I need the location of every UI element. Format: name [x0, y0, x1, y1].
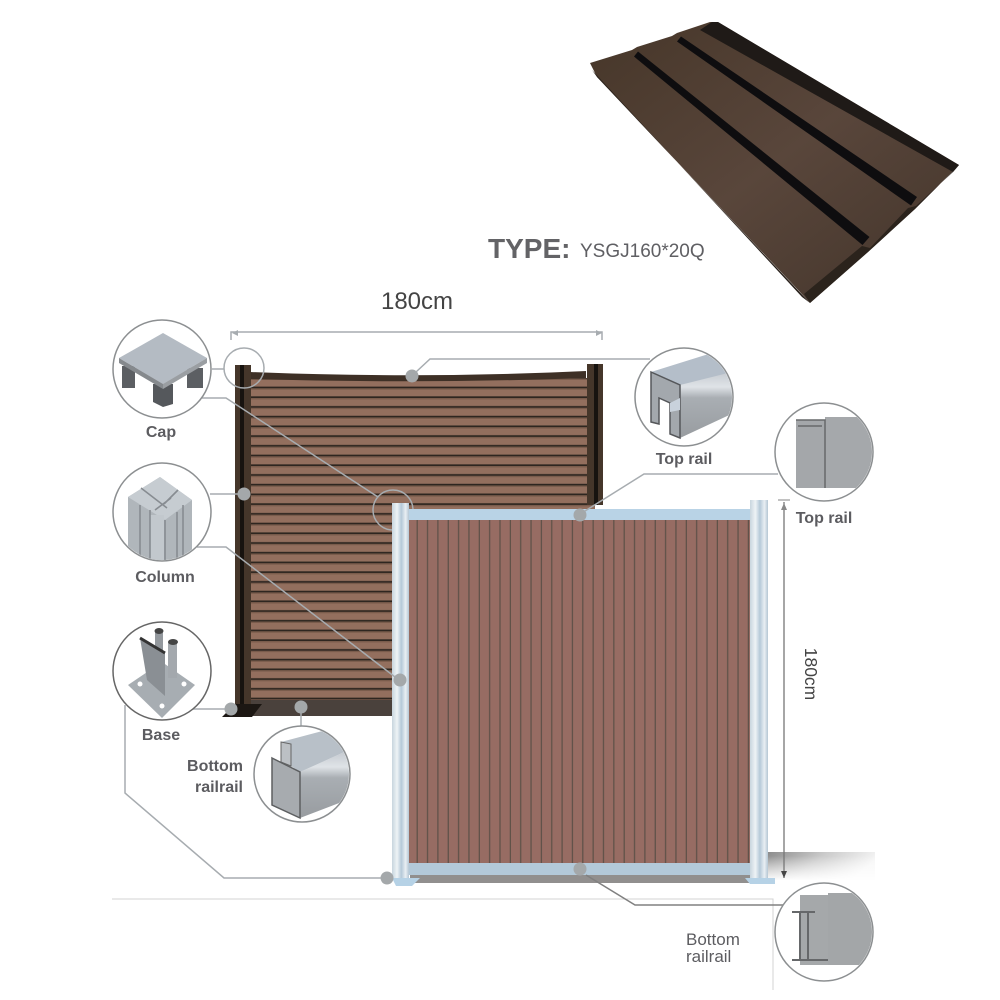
connector dot: base to post — [380, 872, 394, 884]
callout: bottom rail left: Bottom — [187, 758, 243, 775]
callout: top rail upper: Top rail — [656, 451, 712, 468]
callout: bottom rail lower: Bottom — [686, 930, 740, 949]
callout: top rail lower: Top rail — [796, 510, 852, 527]
callout: bottom rail lower — [574, 862, 876, 981]
callout: top rail upper — [406, 348, 740, 468]
callout: bottom rail left — [187, 700, 360, 822]
callout: column: Column — [135, 569, 195, 586]
callout: base: Base — [142, 727, 180, 744]
horizontal dark fence — [222, 364, 603, 717]
callout: top rail lower — [574, 403, 875, 527]
callout: bottom rail left: railrail — [195, 779, 243, 796]
panel product image: wood cladding board — [590, 22, 959, 303]
dimension: fence height 180cm — [778, 500, 821, 878]
connector dot: column to post — [394, 674, 406, 686]
heading: product type: YSGJ160*20Q — [580, 241, 705, 262]
vertical light fence — [392, 500, 775, 886]
ground line — [112, 899, 773, 990]
dimension: fence width 180cm: 180cm — [381, 288, 453, 315]
highlight circle: post joint — [373, 490, 413, 530]
heading: product type: TYPE: — [488, 233, 570, 264]
callout: column — [113, 463, 395, 677]
callout: bottom rail lower: railrail — [686, 947, 731, 966]
callout: base — [113, 622, 384, 878]
dimension: fence width 180cm — [231, 288, 602, 340]
callout: cap: Cap — [146, 424, 176, 441]
callout: cap — [113, 320, 378, 497]
ground shadow of front fence — [410, 852, 875, 883]
heading: product type — [488, 233, 705, 264]
dimension: fence height 180cm: 180cm — [801, 648, 821, 700]
